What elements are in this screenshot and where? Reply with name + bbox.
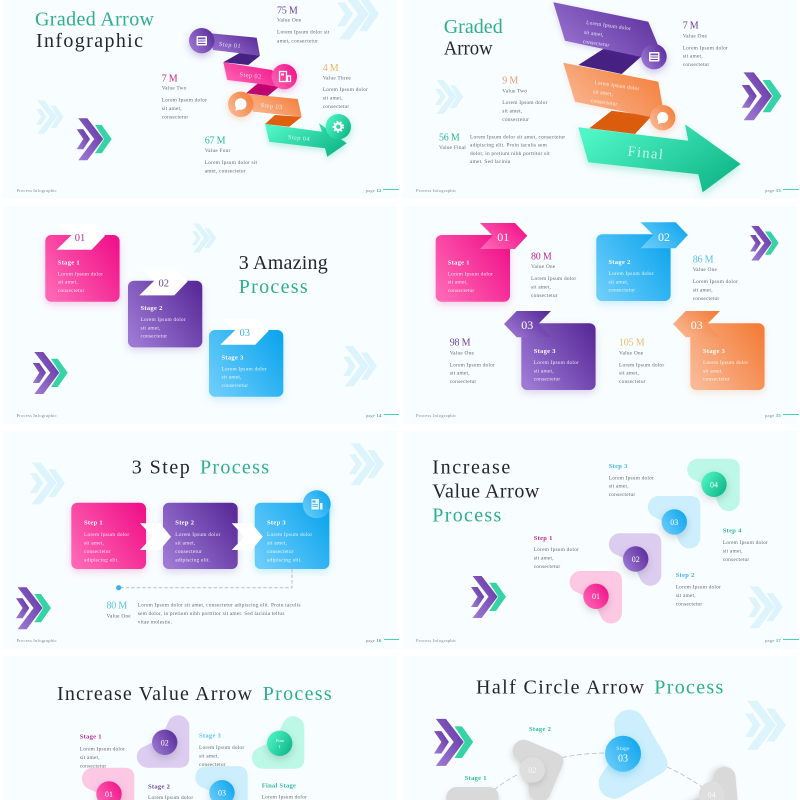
text: 56 M (439, 133, 565, 165)
icon: calculator (641, 44, 667, 69)
card: step 1: Lorem Ipsum dolor (84, 532, 129, 538)
big ribbon arrow: Lorem Ipsum dolor (594, 80, 640, 92)
card: stage 3 orange: sit amet, (703, 368, 724, 374)
card: stage 1: sit amet, (448, 280, 468, 286)
title (132, 456, 269, 478)
text: 4 M: consectetur (323, 104, 349, 110)
card: step 3: sit amet, (267, 540, 288, 546)
text: 4 M: Lorem Ipsum dolor (323, 87, 368, 93)
text: 67 M: Lorem Ipsum dolor sit (205, 160, 258, 166)
text: 80 M: Lorem Ipsum dolor (531, 276, 576, 282)
text: 7 M: consectetur (683, 62, 709, 68)
text: 86 M: Value One (693, 267, 718, 273)
footer: Process Infographic (16, 413, 57, 418)
text: 86 M: 86 M (693, 254, 714, 265)
card: stage 2: Stage 2 (608, 259, 631, 266)
card: step 3: consectetur (267, 549, 294, 555)
step marker 03: 03 (670, 518, 678, 527)
text: step 4: Lorem Ipsum dolor (723, 540, 768, 546)
text: 67 M: amet, consectetur (205, 169, 246, 175)
text: 105 M: Lorem Ipsum dolor (619, 362, 664, 368)
card: stage 3: Lorem Ipsum dolor (222, 366, 267, 372)
text: 56 M: dolor, in pretium nibh porttitor sit (470, 151, 550, 157)
title: Graded (444, 16, 503, 38)
text: 7 M (683, 21, 728, 68)
icon: gear (326, 114, 351, 139)
text: step 4: Step 4 (723, 528, 742, 535)
panel: half circle arrow process (403, 656, 797, 800)
text: final stage: Final Stage (262, 782, 296, 789)
text: 98 M: sit amet, (450, 371, 470, 377)
icon: document (272, 64, 297, 89)
text: stage 3 (199, 732, 244, 768)
text: stage 3: Lorem Ipsum dolor (199, 745, 244, 751)
card: stage 3: sit amet, (222, 375, 242, 381)
title: Process (263, 683, 332, 705)
big ribbon arrow: consectetur (590, 98, 618, 108)
card: stage 2 (596, 222, 688, 301)
text: 56 M: amet. Sed lacinia (470, 159, 511, 165)
text: 80 M: 80 M (106, 600, 127, 611)
ribbon arrow: Step 01 (219, 41, 241, 50)
text: 7 M: sit amet, (162, 106, 182, 112)
text: 80 M: sit amet, (531, 284, 552, 290)
text: stage 1: Stage 1 (80, 734, 102, 741)
card: stage 1: 01 (497, 230, 509, 244)
card: stage 3 orange: Lorem Ipsum dolor (703, 360, 748, 366)
footer (16, 638, 399, 643)
text: 86 M: consectetur (693, 296, 719, 302)
panel: graded arrow (403, 0, 799, 199)
logo chevrons (77, 118, 112, 160)
big ribbon arrow: sit amet, (593, 89, 614, 98)
text: 105 M: consectetur (619, 379, 646, 385)
title: 3 Step (132, 456, 190, 478)
stage 02 gray (497, 736, 566, 800)
card: stage 3: 03 (239, 328, 250, 339)
card: stage 1: consectetur (58, 288, 85, 294)
card: stage 3 purple: consectetur (534, 377, 560, 383)
text: 75 M: 75 M (277, 5, 298, 16)
text: 80 M: 80 M (531, 251, 552, 262)
panel: four stages (403, 206, 799, 424)
step marker 04: 04 (710, 480, 718, 489)
step marker 01: 01 (105, 790, 113, 799)
text: 67 M: Value Four (205, 148, 231, 154)
step marker final: l (279, 744, 281, 749)
stage 03 blue: Stage (616, 746, 630, 752)
footer (416, 638, 799, 643)
text: 80 M: sem dolor, in pretium nibh porttitor sit amet. Sed lacinia tellus (138, 611, 285, 617)
icon: calculator (189, 28, 214, 53)
title: Arrow (444, 38, 493, 60)
connector: dashed line (116, 569, 292, 590)
step marker 02: 02 (632, 555, 640, 564)
text: 7 M: 7 M (683, 21, 699, 32)
step marker 03 (195, 766, 248, 800)
card: stage 2: consectetur (140, 334, 167, 340)
card: stage 3 orange: consectetur (703, 377, 730, 383)
card: stage 1 (45, 224, 120, 302)
text: 7 M: Lorem Ipsum dolor (162, 98, 207, 104)
footer: page 14 (366, 413, 382, 418)
footer: page 17 (765, 638, 781, 643)
text: 56 M: 56 M (439, 133, 460, 144)
title: Increase (432, 456, 510, 478)
stage 03 blue: 03 (618, 753, 628, 764)
card: step 1 (71, 503, 146, 569)
text: step 3 (609, 463, 654, 498)
text: 98 M: consectetur (450, 379, 476, 385)
title (476, 676, 724, 698)
card: step 1: consectetur (84, 549, 111, 555)
card: step 3 (255, 503, 329, 569)
big ribbon arrow: consectetur (582, 39, 610, 49)
card: stage 2: Lorem Ipsum dolor (608, 271, 654, 277)
text: step 1: consectetur (534, 564, 560, 570)
card: stage 2: sit amet, (140, 325, 161, 331)
card: stage 3 orange (673, 311, 765, 390)
text: 4 M: 4 M (323, 63, 339, 74)
card: step 3: Step 3 (267, 520, 286, 527)
title (444, 16, 503, 60)
card: step 1: sit amet, (84, 540, 105, 546)
text: 86 M (693, 254, 738, 302)
card: stage 3 purple (504, 311, 596, 390)
card: stage 2: sit amet, (608, 279, 629, 285)
text: stage 3: sit amet, (199, 754, 220, 760)
step marker final: Fina (276, 738, 284, 743)
text: 4 M (323, 63, 368, 110)
footer: Process Infographic (416, 638, 456, 643)
logo chevrons (16, 587, 51, 629)
footer: Process Infographic (416, 413, 456, 418)
text: step 1: Step 1 (534, 535, 553, 542)
ribbon arrow: Step 02 (239, 71, 262, 81)
label: stage 2: Stage 2 (529, 726, 551, 733)
card: stage 2 (128, 270, 202, 347)
text: 4 M: sit amet, (323, 96, 343, 102)
text: 7 M (162, 74, 207, 121)
text: 86 M: Lorem Ipsum dolor (693, 279, 738, 285)
text: step 3: sit amet, (609, 484, 629, 490)
card: stage 3 orange: Stage 3 (703, 348, 726, 355)
text: step 3: Step 3 (609, 463, 628, 470)
card: stage 1: Stage 1 (58, 259, 80, 266)
card: step 2 (163, 503, 238, 569)
big ribbon arrow: Lorem Ipsum dolor (586, 20, 631, 32)
text: 9 M (502, 75, 548, 123)
step marker 02: 02 (161, 738, 169, 747)
card: stage 2: Stage 2 (140, 305, 163, 312)
card: stage 2: 02 (658, 230, 670, 244)
text: 105 M: 105 M (619, 338, 645, 349)
card: step 3: adipiscing elit. (267, 558, 302, 564)
title (239, 252, 328, 298)
step marker 01 (82, 768, 134, 800)
decor chevrons (192, 224, 377, 387)
panel: graded arrow infographic (3, 0, 399, 199)
card: stage 3 purple: 03 (521, 318, 533, 332)
card: step 2: Lorem Ipsum dolor (175, 532, 221, 538)
title: Process (239, 276, 308, 298)
text: 98 M (450, 338, 495, 385)
card: stage 3 purple: sit amet, (534, 368, 554, 374)
icon: speech bubble (650, 105, 675, 130)
card: step 2: sit amet, (175, 540, 196, 546)
text: 9 M: sit amet, (502, 108, 523, 114)
text: 80 M: Lorem Ipsum dolor sit amet, consectetur adipiscing elit. Proin iaculis (138, 602, 301, 608)
text: 98 M: Value One (450, 351, 475, 357)
decor chevrons (36, 0, 379, 134)
text: step 1: Lorem Ipsum dolor (534, 547, 579, 553)
arrow: white chevron 1 (140, 523, 171, 550)
icon: document (303, 490, 331, 518)
step marker 02 (137, 715, 189, 768)
text: 75 M: Lorem Ipsum dolor sit (277, 30, 330, 36)
footer: page 13 (765, 188, 781, 193)
title: Increase Value Arrow (57, 683, 253, 705)
decor chevrons (745, 701, 786, 750)
text: 7 M: Lorem Ipsum dolor (683, 45, 728, 51)
text: step 2: Step 2 (676, 572, 695, 579)
footer: page 15 (765, 413, 781, 418)
card: stage 1: Lorem Ipsum dolor (448, 271, 493, 277)
text: 67 M (205, 135, 258, 175)
panel: increase value arrow process (403, 431, 799, 649)
card: stage 2: consectetur (608, 288, 635, 294)
title (35, 8, 155, 52)
text: step 2: consectetur (676, 602, 702, 608)
text: 105 M: Value One (619, 351, 644, 357)
footer: Process Infographic (416, 188, 456, 193)
stage 01 gray (446, 787, 499, 800)
card: stage 1 (436, 223, 527, 302)
text: 80 M: Value One (106, 613, 131, 619)
stage 04 gray: 04 (708, 790, 716, 799)
text: stage 1: consectetur (80, 764, 106, 770)
step marker 01: 01 (592, 592, 600, 601)
logo chevrons (750, 226, 779, 260)
label: stage 1: Stage 1 (465, 775, 487, 782)
footer: page 12 (366, 188, 382, 193)
card: stage 2: Lorem Ipsum dolor (140, 317, 186, 323)
text: step 3: Lorem Ipsum dolor (609, 475, 654, 481)
logo chevrons (742, 72, 782, 120)
text: 86 M: sit amet, (693, 288, 713, 294)
text: step 4: sit amet, (723, 548, 743, 554)
text: 9 M: 9 M (502, 75, 518, 86)
decor chevrons (748, 586, 783, 628)
footer: Process Infographic (16, 188, 57, 193)
text: final stage (262, 782, 307, 800)
card: stage 3: Stage 3 (222, 354, 244, 361)
footer (16, 188, 399, 193)
text: 7 M: Value Two (162, 86, 187, 92)
text: 98 M: Lorem Ipsum dolor (450, 362, 495, 368)
footer (16, 413, 399, 418)
text: 9 M: Lorem Ipsum dolor (502, 100, 548, 106)
card: stage 1: Lorem Ipsum dolor (58, 271, 103, 277)
title: Process (654, 676, 724, 698)
stage 02 gray: 02 (528, 766, 536, 775)
text: 7 M: consectetur (162, 115, 188, 121)
text: 4 M: Value Three (323, 75, 351, 81)
text: 75 M: amet, consectetur (277, 38, 318, 44)
text: 7 M: sit amet, (683, 54, 703, 60)
text: 67 M: 67 M (205, 135, 226, 146)
card: step 2: consectetur (175, 549, 202, 555)
footer (416, 413, 799, 418)
text: step 1 (534, 535, 579, 570)
text: 98 M: 98 M (450, 338, 471, 349)
stage 04 gray (682, 766, 739, 800)
footer: Process Infographic (16, 638, 57, 643)
decor chevrons (435, 80, 463, 114)
card: stage 1: consectetur (448, 288, 474, 294)
text: step 2: sit amet, (676, 593, 696, 599)
card: step 2: adipiscing elit. (175, 558, 210, 564)
text: step 4: consectetur (723, 557, 749, 563)
text: step 4 (723, 528, 768, 563)
text: 75 M (277, 5, 330, 44)
card: step 2: Step 2 (175, 520, 194, 527)
card: step 3: Lorem Ipsum dolor (267, 532, 312, 538)
footer: page 16 (366, 638, 382, 643)
step marker 03: 03 (218, 789, 226, 798)
text: step 3: consectetur (609, 492, 635, 498)
text: 80 M: vitae molestie. (138, 619, 172, 625)
text: 80 M (106, 600, 301, 625)
card: stage 2: 02 (158, 279, 169, 290)
text: 7 M: 7 M (162, 74, 178, 85)
ribbon arrow: Step 03 (260, 102, 283, 111)
text: step 1: sit amet, (534, 556, 554, 562)
title: Value Arrow (432, 480, 540, 502)
text: 9 M: Value Two (502, 88, 527, 94)
card: stage 1: 01 (75, 233, 85, 244)
title (432, 456, 540, 527)
step marker 04 (687, 459, 740, 511)
logo chevrons (471, 576, 506, 618)
title: Process (432, 505, 502, 527)
title: 3 Amazing (239, 252, 328, 274)
title: Graded Arrow (35, 8, 155, 30)
step marker 03 (648, 496, 700, 548)
text: stage 1 (80, 734, 125, 770)
step marker 01 (570, 571, 622, 623)
panel: increase value arrow process, staggered (3, 656, 397, 800)
card: stage 1: Stage 1 (448, 259, 470, 266)
text: step 2: Lorem Ipsum dolor (676, 584, 721, 590)
big ribbon arrow (553, 2, 741, 192)
text: stage 3: consectetur (199, 762, 226, 768)
card: step 1: Step 1 (84, 520, 103, 527)
text: stage 2 (148, 784, 193, 800)
footer (416, 188, 799, 193)
step marker 02 (609, 533, 661, 586)
text: stage 2: Stage 2 (148, 784, 170, 791)
card: stage 1: sit amet, (58, 280, 78, 286)
text: 56 M: Lorem Ipsum dolor sit amet, consectetur (470, 134, 565, 140)
step marker final (252, 716, 304, 769)
connector: dashed arc (494, 753, 702, 790)
text: 7 M: Value One (683, 34, 708, 40)
text: 80 M: consectetur (531, 293, 558, 299)
text: 56 M: Value Final (439, 145, 466, 151)
text: 9 M: consectetur (502, 117, 529, 123)
text: stage 1: sit amet, (80, 755, 100, 761)
panel: 3 step process (3, 431, 399, 649)
icon: speech bubble (228, 92, 253, 117)
text: stage 3: Stage 3 (199, 732, 222, 739)
title: Half Circle Arrow (476, 676, 645, 698)
text: 80 M (531, 251, 576, 299)
text: 80 M: Value One (531, 264, 556, 270)
text: 56 M: adipiscing elit. Proin iaculis sem (470, 143, 548, 149)
ribbon arrow: Step 04 (288, 134, 311, 143)
text: 75 M: Value One (277, 18, 302, 24)
text: step 2 (676, 572, 721, 608)
text: stage 1: Lorem Ipsum dolor (80, 746, 125, 752)
card: stage 3 purple: Stage 3 (534, 348, 556, 355)
ribbon arrow (210, 33, 347, 157)
card: stage 3: consectetur (222, 383, 248, 389)
big ribbon arrow: Final (627, 144, 665, 163)
panel: 3 amazing process (3, 206, 399, 424)
card: stage 3 (209, 319, 283, 397)
text: 105 M: sit amet, (619, 371, 640, 377)
decor chevrons (30, 443, 384, 504)
arrow: white chevron 2 (232, 523, 263, 550)
stage 03 blue (572, 704, 672, 800)
title: Infographic (36, 30, 143, 52)
big ribbon arrow: sit amet, (583, 30, 605, 39)
title: Process (200, 456, 269, 478)
card: stage 3 purple: Lorem Ipsum dolor (534, 360, 579, 366)
card: stage 3 orange: 03 (691, 318, 703, 332)
logo chevrons (33, 352, 68, 394)
text: 105 M (619, 338, 664, 385)
card: step 1: adipiscing elit. (84, 558, 119, 564)
logo chevrons (434, 719, 473, 766)
